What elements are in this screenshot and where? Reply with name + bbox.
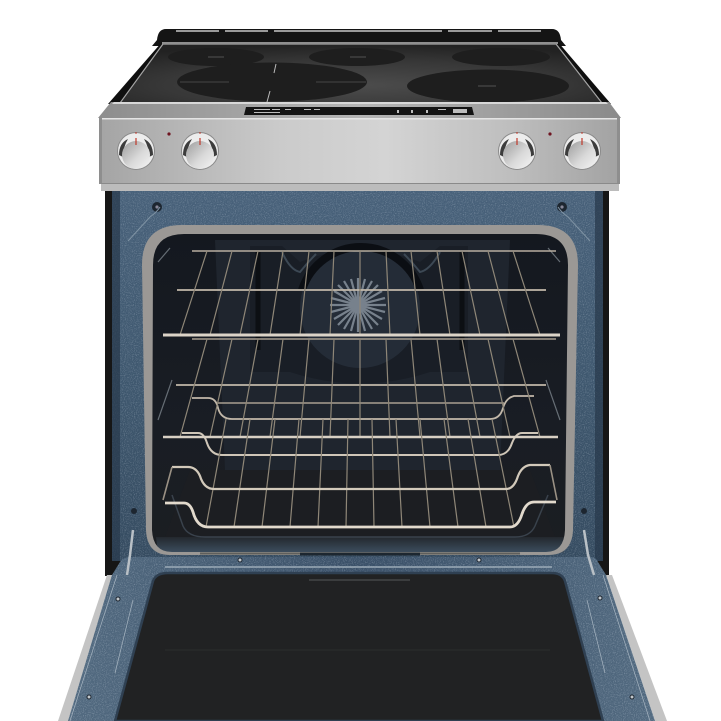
burners <box>168 48 569 102</box>
knob 1 <box>117 132 155 170</box>
door glass <box>115 573 603 721</box>
middle rack <box>163 339 558 455</box>
front fascia <box>99 118 620 184</box>
open door <box>58 557 667 721</box>
door ledge line <box>165 566 552 568</box>
oven body back edges <box>105 188 609 576</box>
top rack <box>163 251 560 339</box>
door edges <box>58 575 113 721</box>
top strip <box>98 102 621 118</box>
cooktop <box>108 29 611 104</box>
door hinges <box>127 530 594 575</box>
glass surface frame <box>108 42 611 104</box>
gasket <box>142 225 578 555</box>
knob 3 <box>498 132 536 170</box>
display panel <box>244 107 474 115</box>
oven frame <box>112 191 603 561</box>
oven cavity <box>148 230 572 554</box>
frame screws <box>152 202 162 212</box>
control panel <box>98 102 621 191</box>
fan <box>330 278 386 332</box>
back wall <box>215 240 510 470</box>
knob 2 <box>181 132 219 170</box>
door inner panel <box>68 557 655 721</box>
floor <box>165 470 555 537</box>
lower rack <box>163 419 557 527</box>
door screws <box>87 558 634 699</box>
indicator lights <box>167 132 171 136</box>
rear trim <box>152 29 566 46</box>
knob 4 <box>563 132 601 170</box>
fan cover <box>250 246 468 384</box>
